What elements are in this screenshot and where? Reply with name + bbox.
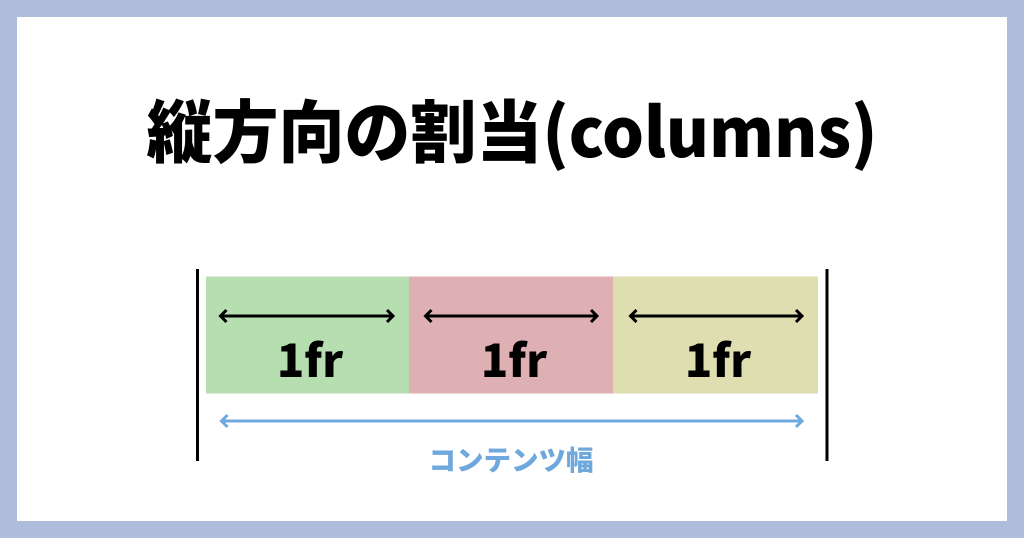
column 2 [409, 276, 613, 394]
grid diagram [196, 269, 828, 478]
label: content width: コンテンツ幅 [428, 438, 594, 478]
column 1 [206, 276, 409, 394]
arrow: column 2 width [425, 314, 598, 318]
arrow: column 1 width [220, 314, 394, 318]
label: column 2: 1fr [481, 325, 547, 390]
label: column 1: 1fr [277, 325, 343, 390]
column 3 [613, 276, 818, 394]
title: 縦方向の割当(columns) [146, 78, 878, 177]
label: column 3: 1fr [685, 325, 751, 390]
right boundary line [826, 269, 828, 461]
arrow: content width [221, 420, 802, 422]
left boundary line [196, 269, 199, 461]
arrow: column 3 width [630, 314, 802, 318]
